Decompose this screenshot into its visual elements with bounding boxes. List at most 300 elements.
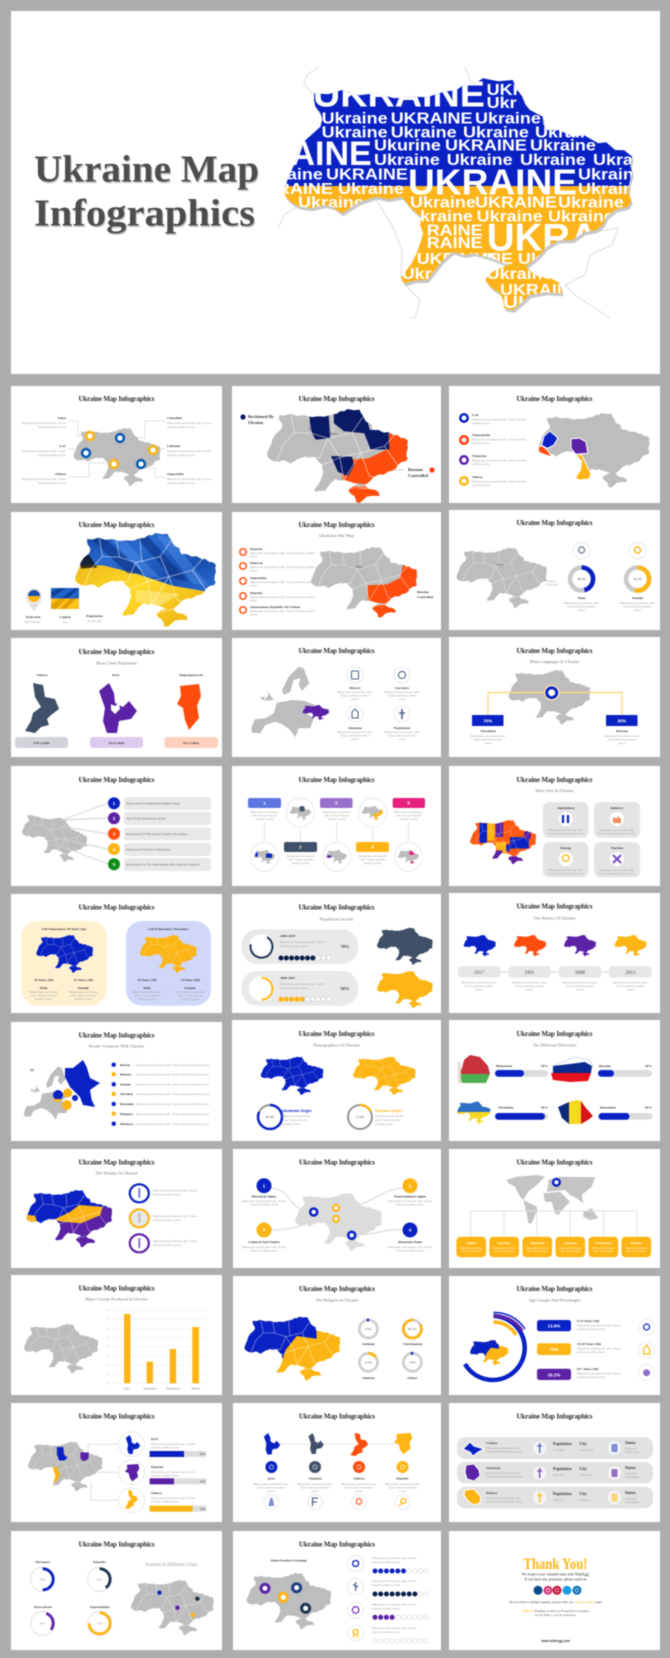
captions: porttitor purus [400, 817, 418, 821]
location marker [553, 1179, 560, 1186]
region list: porttitor purus [472, 441, 490, 445]
heading: Ukraine Map Infographics [516, 519, 593, 527]
markers [265, 1461, 409, 1473]
map with highlighted regions [538, 413, 650, 488]
word-cloud map of Ukraine in flag colours: Ukraine [530, 137, 596, 154]
subheading: The Religion In Ukraine [315, 1298, 359, 1302]
row: 2000-2010: Maecenas sed laoreet odio. Fusce [280, 940, 325, 944]
map filled with waving flag [73, 531, 219, 630]
numbered sights: Maecenas sed laoreet odio. Fusce [388, 1199, 432, 1203]
right labels: lobortis porttitor purus [167, 425, 196, 429]
country list: Hungary [120, 1112, 134, 1116]
subheading: Main Cities Population [96, 660, 138, 666]
ring labels: 40% [97, 1578, 103, 1582]
word-cloud map of Ukraine in flag colours: UKRAINE [326, 165, 408, 183]
panel: slide 1 locations with pins [11, 386, 222, 503]
row: Vinnytsia: 324,319 [553, 1473, 564, 1477]
numbered sights: Maecenas sed laoreet odio. Fusce [242, 1245, 286, 1249]
statistics: Capital [59, 615, 71, 619]
donut: Russian origin: porttitor purus [375, 1122, 393, 1126]
numbered sights: Cultural And Nature [248, 1240, 280, 1244]
heading: Thank You: Thank You! [524, 1556, 588, 1573]
region list: Maecenas sed laoreet odio. Fusce lobortis porttitor [250, 551, 315, 555]
numbered sights: lobortis porttitor purus [396, 1248, 425, 1252]
city: Kyiv: 29.6 Lakhs [108, 741, 125, 745]
row: Vinnytsia: Maecenas sed laoreet odio. [486, 1471, 522, 1475]
heading: Ukraine Map Infographics [299, 1540, 375, 1548]
descriptions: lobortis porttitor purus [153, 1218, 182, 1222]
word-cloud map of Ukraine in flag colours: Ukraine [475, 109, 541, 127]
fact cards: Government [595, 1241, 613, 1245]
bar chart: 4 [108, 1346, 110, 1349]
panel: slide 18 ethnicities [449, 1020, 660, 1141]
fact cards: Maecenas sed laoreet [559, 1247, 582, 1250]
row: Poltava: Poltava [580, 1498, 590, 1502]
card: 50 years ago: Maecenas sed laoreet [29, 990, 58, 994]
row: Poltava: Regional [625, 1496, 637, 1500]
panel: slide 21 world map facts [449, 1149, 660, 1268]
country list: Maecenas sed laoreet odio. Fusce lobortis porttitor purus [136, 1112, 210, 1116]
row: Vinnytsia: Vinnytsia [580, 1473, 592, 1477]
fact cards: Language [564, 1241, 577, 1245]
card: 50 years ago: porttitor purus [74, 997, 93, 1001]
age rows: 70% [549, 1347, 559, 1352]
panel: slide 5 war map: Kiev [356, 565, 363, 569]
card: 50 years ago: odio. Fusce lobortis [71, 994, 96, 998]
region list: Maecenas sed laoreet odio. Fusce lobortis [472, 458, 527, 462]
country list: Romania [120, 1102, 134, 1106]
colourful region map [470, 820, 536, 865]
card: nowadays: 74 Years Old [180, 978, 200, 982]
bar chart: 5 [108, 1336, 110, 1340]
numbered sights: 4 [409, 1228, 412, 1233]
panel: slide 30 thank you [449, 1531, 660, 1650]
row: 2000-2001: Maecenas sed laoreet odio. Fusce [280, 982, 325, 986]
title: Ukraine Map Infographics: Ukraine Map [34, 149, 259, 191]
word-cloud map of Ukraine in flag colours: Ukraine [535, 123, 601, 141]
row: Poltava: Importance [625, 1500, 640, 1504]
captions: Maecenas sed laoreet [358, 854, 387, 858]
blue map [261, 1057, 323, 1095]
right labels [167, 416, 212, 485]
word-cloud map of Ukraine in flag colours: UKR [503, 292, 548, 313]
timeline: purus [526, 988, 534, 992]
ring labels: 30% [40, 1622, 46, 1626]
panel: slide 9 main languages [449, 637, 660, 757]
captions: odio. Fusce lobortis [324, 814, 350, 818]
left labels: lobortis porttitor purus [38, 425, 67, 429]
ring labels: Kirovohrad [34, 1605, 52, 1609]
row: Poltava [457, 1487, 653, 1508]
numbered sights: lobortis porttitor purus [250, 1248, 279, 1252]
age rows: 0-14 Years Old [577, 1319, 599, 1323]
descriptions: Maecenas sed laoreet odio. Fusce [153, 1214, 198, 1218]
credit lines [522, 1609, 589, 1617]
row: Poltava: Poltava [486, 1491, 498, 1495]
card text: Fusce lobortis porttitor purus [547, 832, 585, 836]
word-cloud map of Ukraine in flag colours: Ukraine [257, 165, 323, 183]
captions: Maecenas sed laoreet odio. [254, 1482, 289, 1486]
heading: Ukraine Map Infographics [298, 521, 375, 529]
card: nowadays: Life Expectancy Nowadays [148, 927, 189, 931]
timeline: Maecenas sed laoreet odio. [562, 980, 598, 984]
Russian bar [598, 1064, 652, 1077]
row: Kharkiv: 40% [200, 1480, 206, 1484]
numbered sights: Historical Sights [252, 1194, 277, 1198]
card icons [559, 812, 624, 866]
age rows: lobortis porttitor purus [577, 1327, 606, 1331]
left labels: Volyn [57, 416, 66, 420]
right labels: lobortis porttitor purus [167, 453, 196, 457]
heading: Ukraine Map Infographics [78, 1284, 155, 1292]
timeline: Maecenas sed laoreet odio. [613, 980, 648, 984]
captions: Male [578, 596, 586, 600]
product rows: Maecenas sed laoreet odio. Fusce [372, 1602, 417, 1606]
message [522, 1572, 589, 1582]
age rows [537, 1319, 622, 1380]
panel: slide 4 flag map [11, 512, 222, 630]
donut labels: 0.6% [365, 1327, 372, 1331]
statistics: 603,700 km² [25, 620, 41, 624]
descriptions: lobortis porttitor purus [153, 1243, 182, 1247]
Europe map with bordering countries [24, 1060, 100, 1120]
row: Poltava: Maecenas sed laoreet odio. [486, 1496, 522, 1500]
numbered sights: 2 [409, 1183, 412, 1188]
donut: Ukrainian origin: Maecenas sed laoreet [282, 1114, 311, 1118]
value: Russian: 30% [617, 718, 626, 724]
climate map [26, 1190, 113, 1248]
legend: Russian controlled: Controlled [408, 473, 429, 478]
row: Vinnytsia: Fusce lobortis porttitor purus [486, 1474, 523, 1478]
row: 2000-2010 [242, 929, 358, 964]
bar chart: 0 [108, 1382, 110, 1385]
captions: Maecenas sed laoreet odio. [384, 690, 420, 694]
panel: slide 2 reclaimed vs controlled [232, 386, 441, 505]
timeline: 1917 [474, 971, 484, 976]
numbered list [108, 797, 211, 871]
row: Crimea: 275,958 [553, 1448, 564, 1452]
word-cloud map of Ukraine in flag colours: Ukraine [447, 151, 513, 169]
left labels: lobortis porttitor purus [38, 481, 67, 485]
region list: porttitor purus [472, 483, 490, 487]
row: Crimea: Regional [625, 1446, 637, 1450]
map with markers [247, 1573, 331, 1629]
card: 50 years ago: Maecenas sed laoreet [69, 990, 98, 994]
captions: Fusce lobortis porttitor [623, 604, 652, 608]
ring labels: 50% [40, 1578, 46, 1582]
label: Russian controlled: Controlled [417, 595, 433, 599]
panel: slide 14 population growth [232, 894, 441, 1013]
bar chart: 6 [108, 1327, 110, 1330]
card: 50 years ago: porttitor purus [35, 997, 53, 1001]
numbered pills: 4 [371, 844, 374, 850]
region list [460, 413, 527, 487]
connector lines [488, 692, 622, 715]
word-cloud map of Ukraine in flag colours [284, 78, 634, 314]
panel: slide 27 region status table [449, 1403, 660, 1522]
region list: purus [250, 554, 258, 558]
timeline: Fusce lobortis porttitor [616, 984, 645, 988]
subheading: Ukrainian War Map [319, 533, 355, 538]
country list: Moldova [120, 1122, 133, 1126]
captions: odio. Fusce lobortis [288, 858, 314, 862]
captions: porttitor purus [364, 861, 382, 865]
captions: purus [398, 697, 406, 701]
subheading: Age Groups And Percentages [529, 1298, 581, 1302]
panel: slide 2 reclaimed vs controlled: Kiev [330, 432, 337, 436]
row: 2000-2010: lobortis porttitor purus [280, 944, 309, 948]
card: 50 years ago: 45 Years Old [34, 978, 53, 982]
captions: Fusce lobortis porttitor [388, 1486, 417, 1490]
region list: Maecenas sed laoreet odio. Fusce lobortis porttitor [250, 595, 315, 599]
country list: Russia [120, 1063, 130, 1067]
map [311, 547, 418, 619]
captions: Population [394, 726, 410, 730]
captions: porttitor purus [292, 861, 310, 865]
heading: Ukraine Map Infographics [298, 1030, 375, 1038]
captions: Maecenas sed laoreet [394, 810, 423, 814]
subheading: Border Countries With Ukraine [89, 1044, 144, 1048]
heading: Ukraine Map Infographics [299, 1285, 375, 1293]
row: Crimea: Population [553, 1441, 572, 1446]
card: nowadays: Maecenas sed laoreet [176, 990, 204, 994]
legend: Russian controlled: Russian [408, 467, 423, 472]
captions: Maecenas sed laoreet odio. [297, 1482, 333, 1486]
card: nowadays: odio. Fusce lobortis [134, 994, 160, 998]
numbered pills: 2 [299, 844, 302, 850]
captions: Fusce lobortis porttitor [341, 694, 369, 698]
Russia flag map [551, 1057, 593, 1082]
map [74, 428, 160, 486]
country list: Slovakia [120, 1092, 133, 1096]
connecting line [263, 1443, 412, 1445]
captions [250, 810, 423, 865]
captions: Maecenas sed laoreet odio. [384, 730, 420, 734]
bar chart: 1 [108, 1373, 110, 1376]
row: Odessa: lobortis porttitor purus [151, 1500, 180, 1504]
donut: Ukrainian origin [258, 1105, 312, 1129]
fact cards: Maecenas sed laoreet [625, 1247, 648, 1250]
row: Odessa [150, 1491, 206, 1512]
card: nowadays: Female [185, 986, 196, 990]
timeline: purus [576, 988, 584, 992]
fact cards: odio. Fusce lobortis [494, 1250, 515, 1253]
card text [547, 806, 636, 876]
donut: Ukrainian origin: porttitor purus [282, 1122, 300, 1126]
captions [564, 596, 656, 612]
map [456, 548, 547, 608]
job cards [543, 802, 640, 877]
heading: Ukraine Map Infographics [298, 647, 375, 655]
icon: flag square [51, 588, 79, 609]
donut: female: 53.7% [633, 577, 642, 581]
row: Vinnytsia: Importance [625, 1475, 640, 1479]
icons [573, 542, 646, 559]
word-cloud map of Ukraine in flag colours: Ukraine [402, 265, 468, 283]
numbered pills: 3 [335, 800, 338, 806]
word-cloud map of Ukraine in flag colours: Ukraine [548, 207, 614, 225]
word-cloud map of Ukraine in flag colours: Ukurine [374, 137, 441, 154]
row: Vinnytsia: City [580, 1466, 587, 1471]
panel: slide 16 border countries [11, 1022, 222, 1141]
left labels: Maecenas sed laoreet odio. Fusce [22, 421, 66, 425]
map [244, 1316, 340, 1380]
row: Poltava: Population [553, 1491, 572, 1496]
connector lines [56, 803, 108, 864]
donut: Ukrainian origin: Ukrainian Origin [282, 1109, 312, 1113]
captions: Female [632, 596, 643, 600]
design request line: Do you have a design request, please visit our custom design page [509, 1600, 602, 1605]
word-cloud map of Ukraine in flag colours: UKRAINE [445, 137, 527, 154]
ring labels: Kharkiv [93, 1560, 106, 1564]
oval mini maps [250, 798, 422, 871]
donut labels [362, 1327, 422, 1380]
captions: Kyiv [268, 1476, 275, 1480]
city: Kyiv [90, 673, 143, 748]
region list: purus [250, 598, 258, 602]
legend: Russian controlled [393, 467, 435, 478]
card text: Fusce lobortis porttitor purus [599, 832, 636, 836]
Romanian bar: 60% [645, 1106, 652, 1110]
panel: slide 17 demographics [232, 1020, 441, 1141]
right labels: lobortis porttitor purus [167, 481, 196, 485]
word-cloud map of Ukraine in flag colours: Ukraine [477, 207, 543, 225]
icons [264, 1494, 410, 1510]
heading: Ukraine Map Infographics [78, 1412, 155, 1420]
fact cards: odio. Fusce lobortis [560, 1250, 581, 1253]
card text: Fusce lobortis porttitor purus [547, 872, 585, 876]
captions: odio. Fusce lobortis [396, 814, 422, 818]
ring labels: Zhytomyr [35, 1560, 51, 1564]
captions: Kharkiv [396, 1476, 409, 1480]
region list: Maecenas sed laoreet odio. Fusce lobortis porttitor [250, 565, 315, 569]
timeline: Maecenas sed laoreet odio. [461, 980, 497, 984]
numbered sights: Maecenas sed laoreet odio. Fusce [388, 1245, 432, 1249]
oval city shapes [119, 1432, 145, 1513]
captions: Vinnitsia [308, 1476, 322, 1480]
panel: slide 3 western regions [449, 386, 660, 503]
card text: Maecenas sed laoreet odio. [548, 828, 584, 832]
region list: Kharkiv [250, 591, 263, 595]
numbered sights: 1 [263, 1183, 266, 1188]
left labels: Maecenas sed laoreet odio. Fusce [22, 477, 66, 481]
row: Odessa: 75% [200, 1507, 206, 1511]
bar chart [108, 1309, 206, 1390]
captions: Fusce lobortis porttitor [345, 1486, 373, 1490]
donut: Russian origin: Maecenas sed laoreet [375, 1114, 404, 1118]
captions: purus [268, 1489, 276, 1493]
bar chart: Corn [124, 1386, 131, 1390]
captions: porttitor purus [328, 817, 346, 821]
captions: purus [311, 1489, 319, 1493]
connector tree [470, 1211, 637, 1237]
panel: slide 6 male and female: Russian [546, 579, 556, 583]
statistics [25, 614, 103, 624]
age rows: Maecenas sed laoreet odio. Fusce [577, 1346, 622, 1350]
website: www.slideegg.com [540, 1639, 570, 1643]
city: Kyiv: Kyiv [112, 673, 120, 677]
panel: slide 8 location in Europe [232, 638, 441, 757]
value: Russian: Fusce lobortis porttitor [608, 738, 636, 742]
subheading: The Different Ethnicities [533, 1042, 577, 1048]
numbered list: Monument To Magdeburg Rights (Kyiv) [126, 802, 180, 806]
region list: Kherson [250, 561, 263, 565]
row: Vinnytsia [457, 1462, 653, 1483]
fact cards: Capital [466, 1241, 476, 1245]
row: Poltava: Status [625, 1490, 636, 1495]
age rows: 15-64 Years Old [577, 1342, 601, 1346]
panel: hero cover slide [11, 11, 660, 374]
panel: slide 25 city comparison [11, 1403, 222, 1522]
card: 50 years ago: Female [78, 986, 89, 990]
row: Vinnytsia: Status [625, 1465, 636, 1470]
subheading: Main Languages In Ukraine [530, 659, 579, 664]
panel: slide 5 war map [232, 512, 441, 630]
panel: slide 19 weather [11, 1149, 222, 1268]
card text: Industry [610, 806, 624, 810]
donut: male [570, 568, 593, 590]
fact cards: Religion [631, 1241, 642, 1245]
word-cloud map of Ukraine in flag colours: UKRAINE [475, 193, 557, 211]
Belarus flag map [458, 1055, 490, 1083]
neighbouring border lines [278, 67, 618, 318]
panel: slide 29 main farming products [233, 1531, 441, 1650]
product rows: Maecenas sed laoreet odio. Fusce [372, 1626, 417, 1630]
numbered list: Monument To Prince Volodymyr [126, 848, 170, 852]
product rows: lobortis porttitor purus [372, 1606, 401, 1610]
numbered list: 4 [113, 847, 116, 852]
Ukraine flag map [456, 1100, 492, 1124]
fact cards: odio. Fusce lobortis [527, 1250, 548, 1253]
word-cloud map of Ukraine in flag colours: Ukraine [374, 151, 440, 169]
card text: Maecenas sed laoreet odio. [599, 868, 635, 872]
captions: Fusce lobortis porttitor [301, 1486, 329, 1490]
credit lines: CREDIT: SlideEgg created by PowerPoint templates [522, 1609, 589, 1613]
card text: Tourism [611, 846, 623, 850]
card: nowadays: odio. Fusce lobortis [177, 994, 203, 998]
timeline: purus [475, 988, 483, 992]
heading: Ukraine Map Infographics [516, 776, 593, 784]
numbered sights: lobortis porttitor purus [250, 1202, 279, 1206]
numbered list: 3 [113, 832, 116, 836]
fact cards: odio. Fusce lobortis [626, 1250, 647, 1253]
legend: reclaimed [240, 414, 310, 425]
map markers [310, 1205, 355, 1239]
Belarusian bar [495, 1064, 548, 1077]
route curves [270, 1188, 404, 1235]
heading: Ukraine Map Infographics [299, 1158, 375, 1166]
map with city regions [28, 1442, 102, 1491]
captions: Maecenas sed laoreet odio. [385, 1482, 421, 1486]
map [22, 811, 87, 866]
word-cloud map of Ukraine in flag colours: Ukraine [578, 165, 644, 183]
city: Odessa: 9.93 Lakhs [33, 741, 50, 745]
country list: Maecenas sed laoreet odio. Fusce lobortis porttitor purus [136, 1082, 210, 1086]
city: Odessa [15, 673, 68, 748]
age rows: 13.9% [548, 1324, 560, 1328]
card text: Energy [560, 846, 571, 850]
right labels: Luhansk [167, 444, 180, 448]
numbered list: 2 [113, 816, 116, 821]
row: Crimea: Status [625, 1440, 636, 1445]
statistics: Total area [25, 615, 41, 619]
country list: Maecenas sed laoreet odio. Fusce lobortis porttitor purus [136, 1063, 210, 1067]
bar chart: 7 [108, 1318, 110, 1321]
captions: odio. Fusce lobortis [360, 858, 386, 862]
timeline: 2013 [626, 971, 636, 976]
descriptions: lobortis porttitor purus [153, 1192, 182, 1196]
value: Ukrainian [470, 715, 506, 745]
